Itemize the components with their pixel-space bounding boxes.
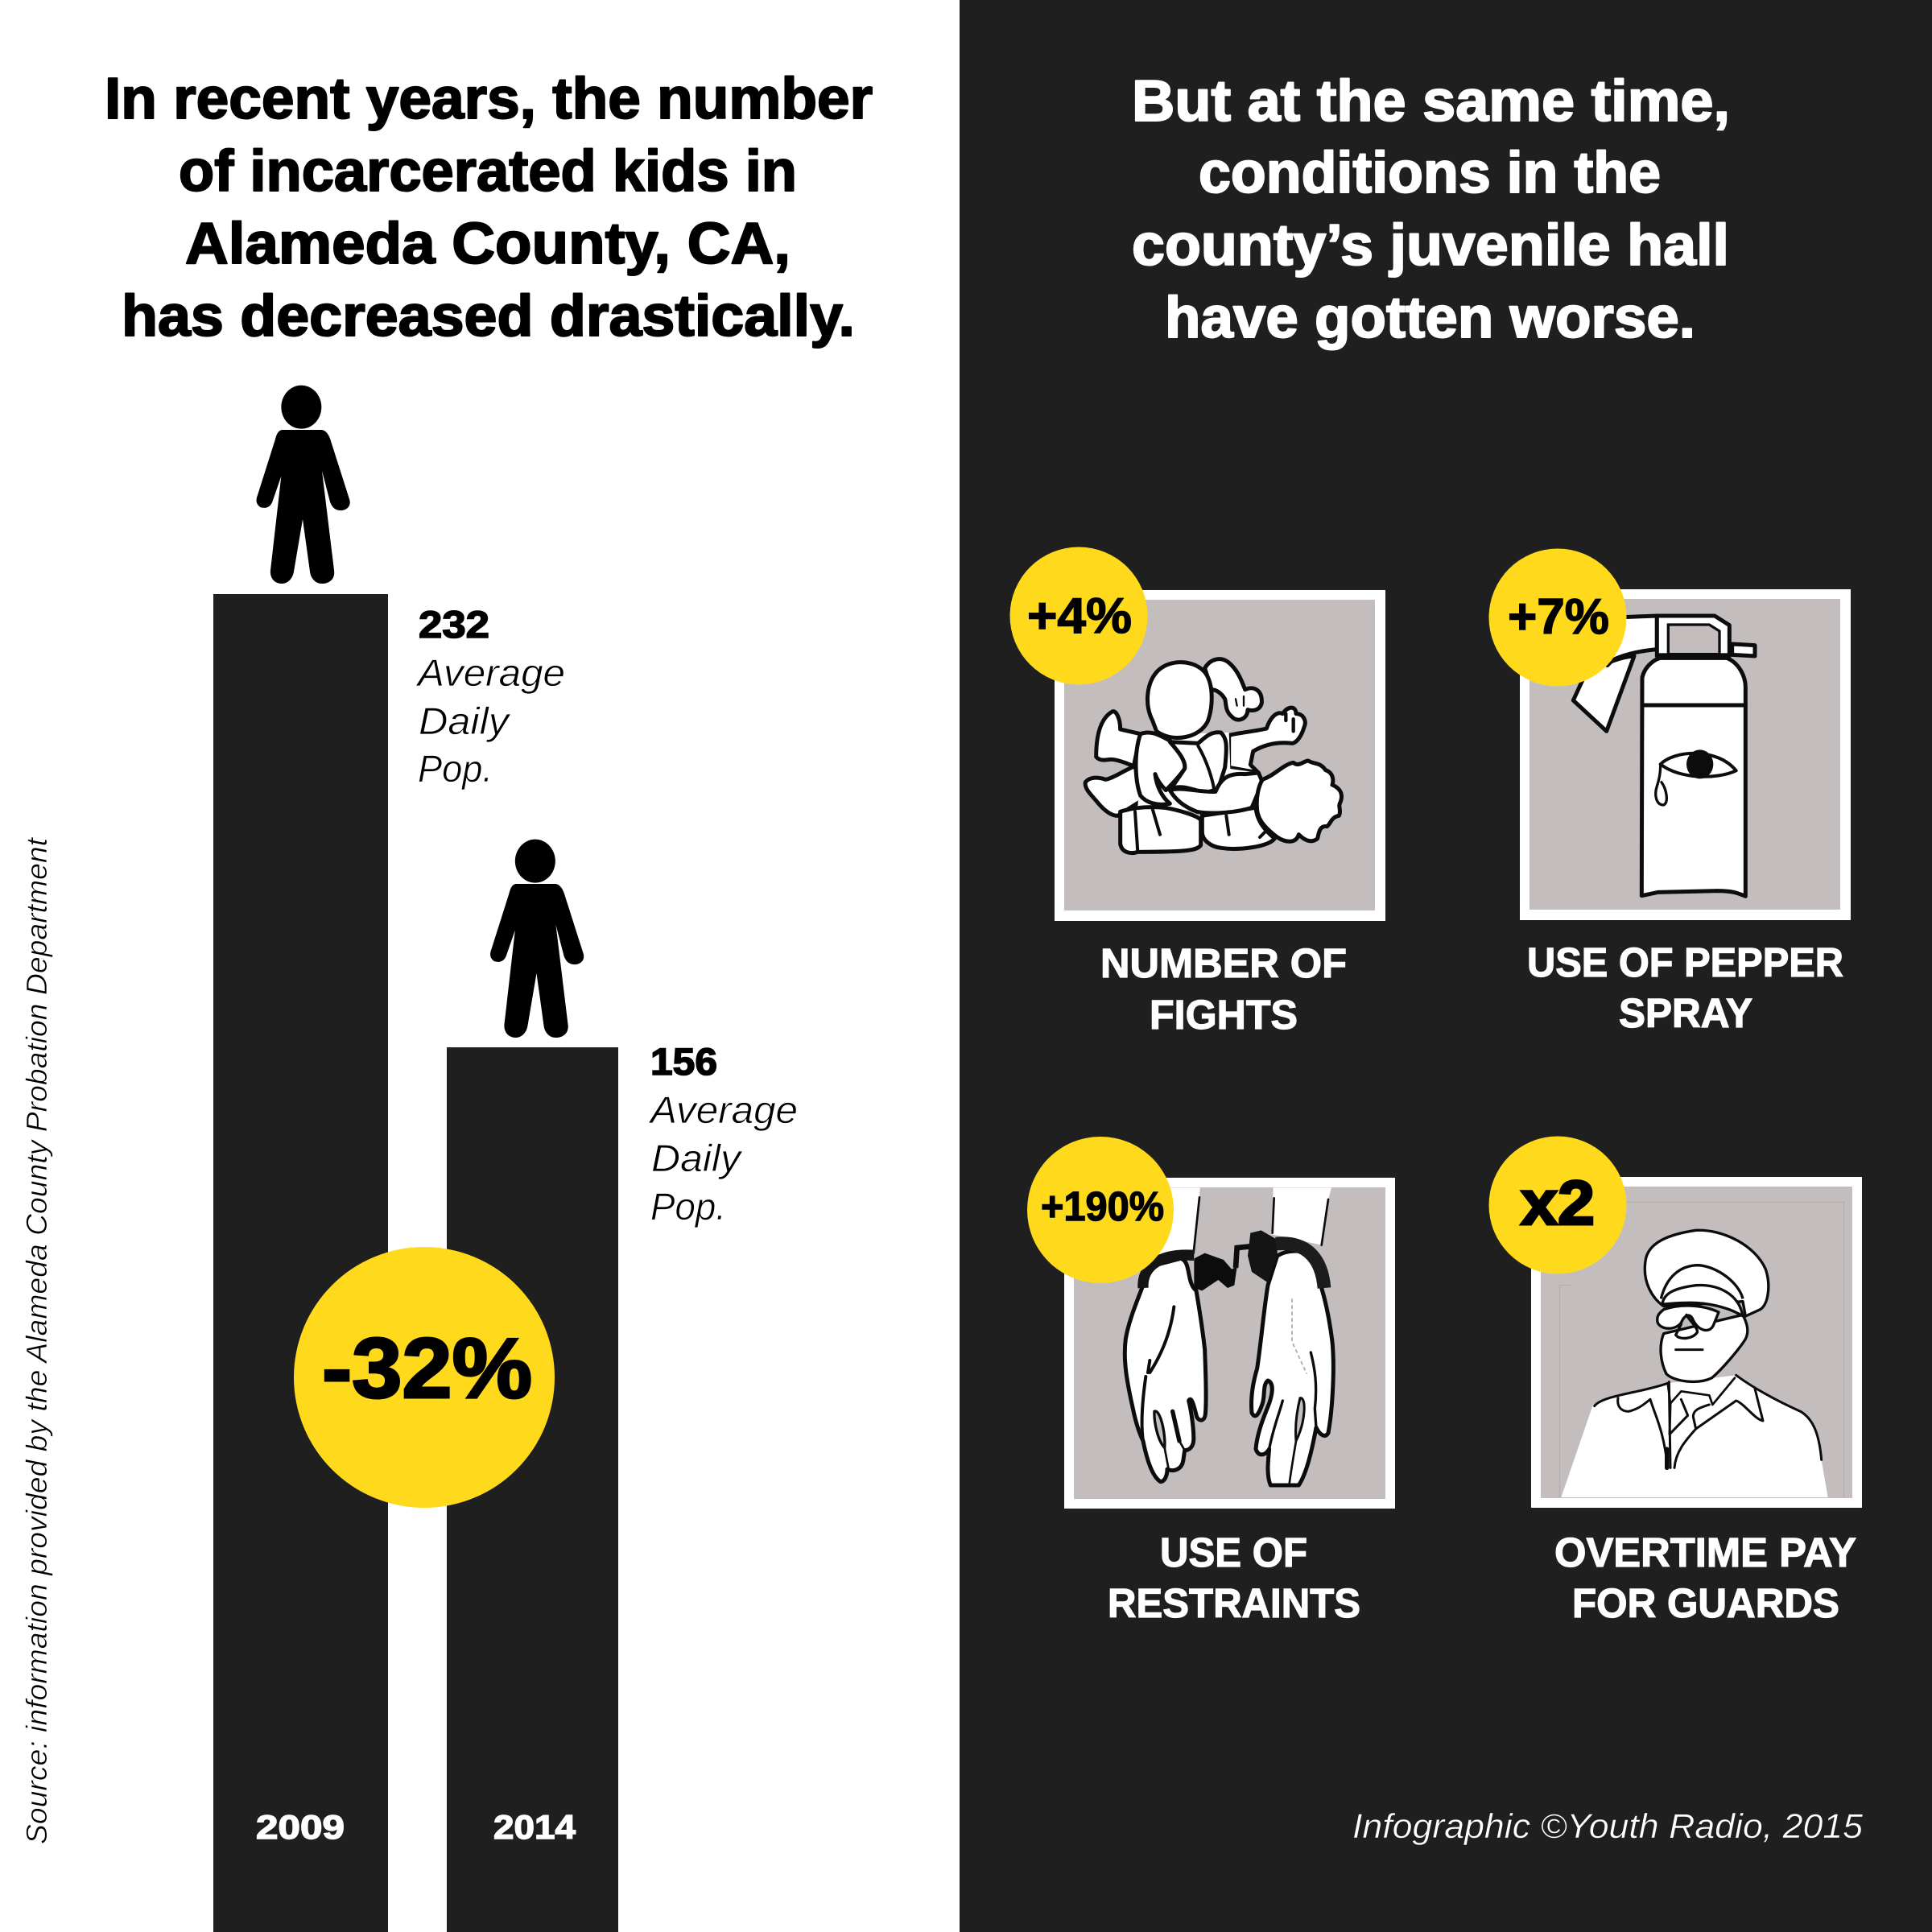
stat: 156 average daily pop: Daily — [651, 1137, 743, 1179]
label: overtime pay for guards: FOR GUARDS — [1572, 1580, 1839, 1626]
label: number of fights: NUMBER OF — [1100, 940, 1347, 986]
panel: use of pepper spray — [1489, 549, 1851, 920]
label: overtime pay for guards — [1554, 1530, 1856, 1626]
stat: 156 average daily pop: 156 — [650, 1040, 717, 1083]
bar: 2009 — [213, 594, 388, 1932]
panel: right background — [960, 0, 1932, 1932]
heading: left: has decreased drastically. — [122, 284, 855, 349]
icon: person on 2009 bar — [257, 386, 350, 584]
label: overtime pay for guards: OVERTIME PAY — [1554, 1530, 1856, 1575]
icon: pepper spray can — [1573, 616, 1755, 896]
stat: 232 average daily pop: 232 — [419, 603, 489, 646]
badge: +4%: +4% — [1027, 588, 1132, 644]
icon: fighting kids — [1085, 659, 1342, 853]
badge: +190% — [1027, 1137, 1174, 1283]
panel: use of restraints — [1027, 1137, 1395, 1509]
label: number of fights: FIGHTS — [1150, 992, 1298, 1038]
label: use of restraints — [1108, 1530, 1360, 1626]
heading: right — [1132, 69, 1730, 350]
label: use of restraints: RESTRAINTS — [1108, 1580, 1360, 1626]
stat: 156 average daily pop: Pop. — [650, 1185, 726, 1228]
heading: right: county’s juvenile hall — [1132, 213, 1729, 278]
heading: right: have gotten worse. — [1165, 286, 1695, 350]
stat: 232 average daily pop — [415, 603, 565, 790]
panel: left background — [0, 0, 960, 1932]
bar: 2014 — [447, 1047, 618, 1932]
icon: cuffed hands — [1125, 1187, 1333, 1485]
stat: 232 average daily pop: Pop. — [418, 747, 493, 790]
badge: +7%: +7% — [1508, 589, 1609, 645]
icon: person on 2014 bar — [490, 840, 584, 1038]
panel: overtime pay for guards — [1489, 1137, 1862, 1508]
heading: right: But at the same time, — [1132, 69, 1730, 134]
label: number of fights — [1100, 940, 1347, 1038]
icon: guard — [1559, 1202, 1844, 1497]
badge: x2 — [1489, 1137, 1626, 1274]
stat: 232 average daily pop: Average — [415, 651, 565, 694]
stat: 232 average daily pop: Daily — [419, 700, 511, 742]
year label: 2014: 2014 — [493, 1808, 576, 1846]
source note: Source: information provided by the Alameda County Probation Department — [20, 836, 53, 1844]
badge: +4% — [1009, 547, 1148, 684]
label: use of pepper spray: SPRAY — [1619, 990, 1752, 1036]
heading: left: of incarcerated kids in — [179, 139, 797, 204]
badge: x2: x2 — [1521, 1167, 1595, 1238]
label: use of pepper spray — [1527, 939, 1843, 1036]
heading: left: In recent years, the number — [105, 67, 873, 131]
badge: +7% — [1489, 549, 1626, 686]
credit line: Infographic ©Youth Radio, 2015 — [1352, 1807, 1864, 1846]
callout: minus 32 percent — [294, 1247, 555, 1508]
panel: number of fights — [1009, 547, 1385, 921]
badge: +190%: +190% — [1041, 1183, 1164, 1229]
stat: 156 average daily pop — [648, 1040, 798, 1228]
label: use of restraints: USE OF — [1160, 1530, 1307, 1575]
heading: right: conditions in the — [1199, 141, 1661, 205]
heading: left — [105, 67, 873, 349]
stat: 156 average daily pop: Average — [648, 1088, 798, 1131]
label: use of pepper spray: USE OF PEPPER — [1527, 939, 1843, 985]
heading: left: Alameda County, CA, — [185, 212, 791, 276]
year label: 2009: 2009 — [256, 1808, 345, 1846]
callout: minus 32 percent: -32% — [322, 1321, 532, 1416]
